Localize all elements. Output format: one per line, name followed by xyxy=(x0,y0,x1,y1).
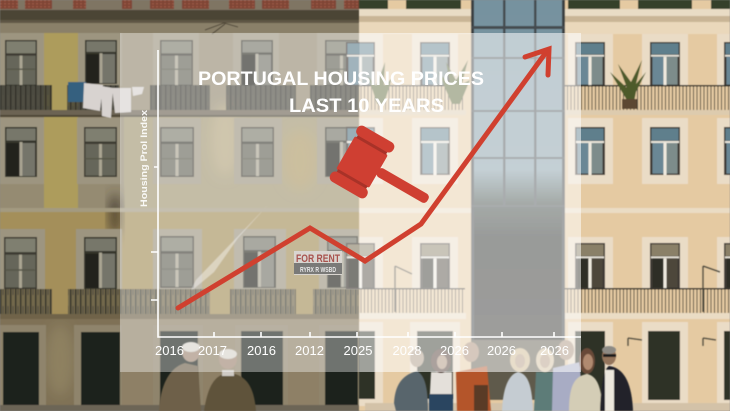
faint wall wedge xyxy=(190,205,268,292)
doors xyxy=(359,331,730,400)
window surrounds xyxy=(0,33,360,289)
for rent sign: RYRX R WSBD xyxy=(300,267,336,274)
price trend arrow xyxy=(178,49,549,308)
doors xyxy=(0,325,360,405)
people: young group xyxy=(394,340,633,411)
title: LAST 10 YEARS xyxy=(289,95,444,117)
chart axes xyxy=(151,50,581,337)
x axis labels: 2026 xyxy=(487,343,516,358)
x axis labels: 2012 xyxy=(295,343,324,358)
planters xyxy=(359,0,730,9)
for rent sign xyxy=(294,251,342,275)
wall lamps xyxy=(395,266,720,346)
title xyxy=(198,68,484,117)
roof tiles xyxy=(0,0,360,11)
windows xyxy=(346,42,375,86)
balconies, upper xyxy=(0,85,360,110)
x axis labels: 2025 xyxy=(344,343,372,358)
glass tower xyxy=(471,0,565,340)
cornice xyxy=(0,10,360,20)
laundry xyxy=(68,82,86,102)
balconies xyxy=(359,85,730,313)
people: elderly couple xyxy=(159,342,256,411)
title: PORTUGAL HOUSING PRICES xyxy=(198,68,484,90)
palms xyxy=(610,60,646,102)
x axis labels: 2028 xyxy=(393,343,421,358)
stone surrounds xyxy=(359,34,730,406)
y axis label: Housing Prol Index xyxy=(139,109,150,207)
x axis labels xyxy=(155,343,569,358)
band xyxy=(0,208,360,212)
x axis labels: 2016 xyxy=(247,343,276,358)
old building facade xyxy=(0,0,360,411)
gavel icon xyxy=(328,124,444,228)
x axis labels: 2016 xyxy=(155,343,184,358)
x axis labels: 2026 xyxy=(440,343,469,358)
new building facade xyxy=(346,0,730,411)
x axis labels: 2017 xyxy=(198,343,227,358)
translucent chart panel xyxy=(120,33,581,372)
balconies, lower xyxy=(0,289,360,314)
x axis labels: 2026 xyxy=(540,343,569,358)
for rent sign: FOR RENT xyxy=(296,253,340,265)
